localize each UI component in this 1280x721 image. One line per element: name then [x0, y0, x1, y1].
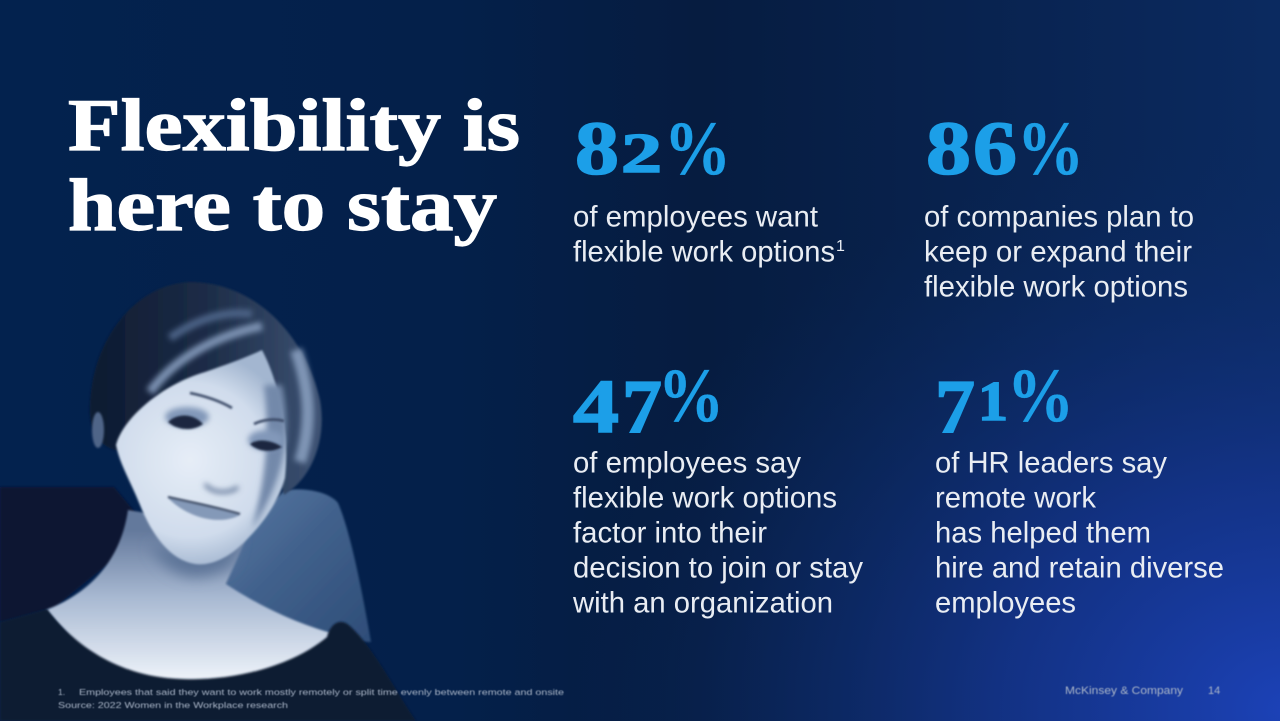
stat: 82%: %	[664, 107, 731, 191]
stat: 71%: 1	[978, 371, 1008, 433]
shirt	[0, 609, 416, 721]
text: 71% description: employees	[935, 586, 1076, 620]
stat: 47%: %	[658, 354, 724, 438]
footnote and source: 1.	[58, 687, 65, 697]
eyes and brows	[168, 393, 284, 451]
page number: 14	[1208, 685, 1220, 697]
stat: 47%: 7	[622, 365, 662, 449]
stat: 86%: 6	[973, 107, 1017, 191]
footnote and source: Employees that said they want to work mostly remotely or split time evenly between remote and onsite	[79, 687, 564, 697]
text: 71% description: of HR leaders say	[935, 446, 1167, 480]
text: 47% description	[572, 446, 863, 620]
photo: smiling woman in chair	[0, 282, 416, 721]
stat: 86%: 8	[926, 107, 971, 191]
text: 47% description: decision to join or stay	[573, 552, 863, 584]
title	[68, 85, 520, 247]
stat: 71%: %	[1007, 354, 1074, 438]
text: 71% description: has helped them	[935, 516, 1151, 550]
stat: 47%	[573, 354, 724, 449]
title: Flexibility is	[68, 85, 520, 167]
stat: 82%	[575, 107, 731, 191]
neck and chest	[46, 510, 335, 692]
chair back right	[222, 489, 371, 642]
text: 71% description	[935, 446, 1224, 620]
eye sockets	[165, 407, 284, 450]
text: 82% description: of employees want	[573, 200, 818, 234]
stat: 71%: 7	[935, 365, 975, 449]
title: here to stay	[68, 165, 497, 247]
text: 86% description	[924, 200, 1194, 304]
footnote and source: Source: 2022 Women in the Workplace research	[58, 700, 288, 710]
face	[116, 350, 286, 564]
mouth	[168, 497, 240, 520]
text: 86% description: keep or expand their	[924, 236, 1192, 268]
text: 82% description: flexible work options	[573, 236, 835, 268]
brand: McKinsey & Company: McKinsey & Company	[1065, 685, 1184, 697]
text: 47% description: factor into their	[573, 516, 767, 550]
stat: 47%: 4	[573, 365, 619, 449]
text: 86% description: of companies plan to	[924, 200, 1194, 234]
footnote and source	[58, 687, 564, 710]
text: 47% description: of employees say	[573, 446, 801, 480]
stat: 82%: 8	[575, 107, 619, 191]
text: 47% description: flexible work options	[573, 482, 837, 514]
text: 86% description: flexible work options	[924, 270, 1188, 304]
nose	[205, 484, 238, 492]
stat: 86%	[926, 107, 1084, 191]
hair silhouette	[90, 282, 322, 495]
hair strands	[150, 326, 262, 392]
right cheek shadow	[252, 385, 286, 528]
text: 71% description: remote work	[935, 482, 1096, 514]
chin shadow	[150, 535, 240, 577]
text: 71% description: hire and retain diverse	[935, 552, 1224, 584]
text: 82% description: 1	[836, 238, 845, 255]
stat: 71%	[935, 354, 1074, 449]
ear	[92, 412, 104, 448]
chair back left	[0, 487, 150, 622]
text: 47% description: with an organization	[572, 586, 833, 620]
stat: 86%: %	[1017, 107, 1084, 191]
stat: 82%: 2	[621, 123, 662, 185]
text: 82% description	[573, 200, 845, 268]
